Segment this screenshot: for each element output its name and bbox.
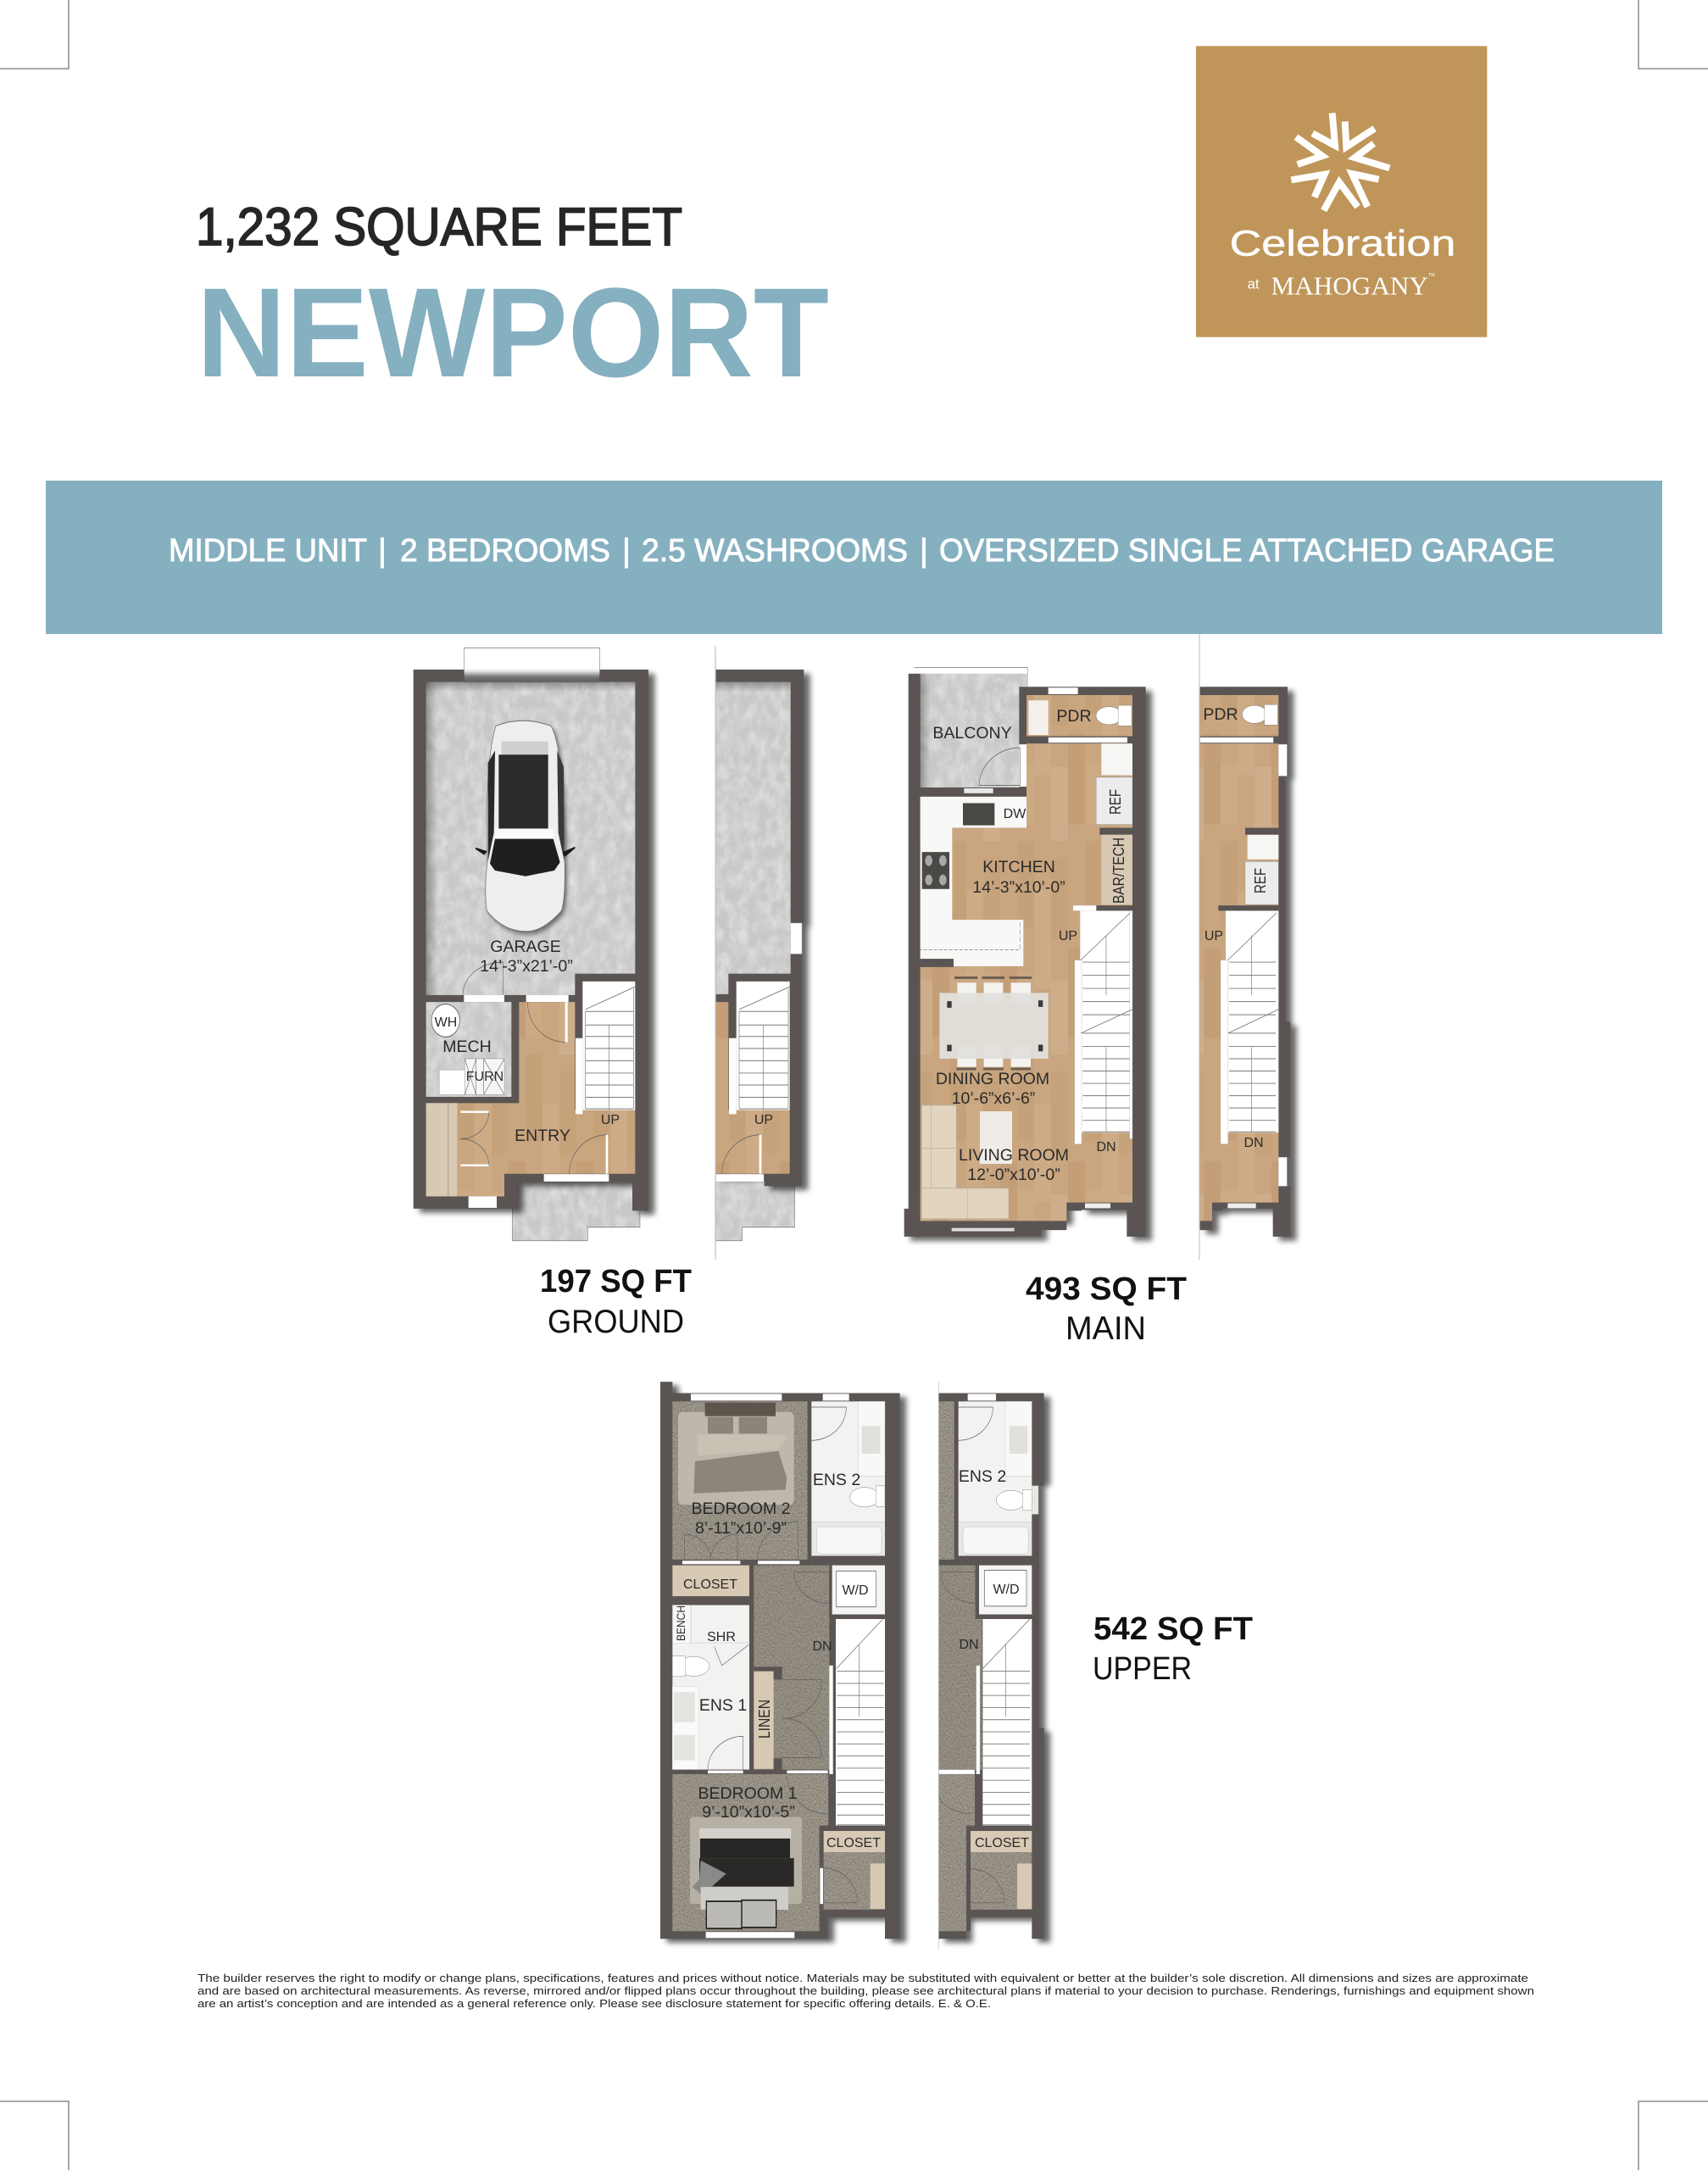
label: mech: MECH bbox=[442, 1038, 492, 1056]
title: NEWPORT: NEWPORT bbox=[197, 261, 829, 403]
bed 1 bbox=[693, 1828, 794, 1928]
divider line bbox=[1199, 634, 1200, 1260]
car bbox=[476, 721, 575, 935]
banner text: | bbox=[920, 533, 928, 569]
banner text: MIDDLE UNIT bbox=[169, 533, 367, 569]
label: down: DN bbox=[1096, 1140, 1116, 1155]
panel: ground floor plan bbox=[414, 648, 810, 1259]
label: bedroom 1 size: 9’-10”x10’-5” bbox=[702, 1803, 795, 1822]
ground plan drawing bbox=[414, 648, 654, 1241]
label: living size: 12’-0”x10’-0” bbox=[967, 1166, 1060, 1184]
banner text: 2 BEDROOMS bbox=[400, 533, 610, 569]
icon: starburst bbox=[1291, 113, 1389, 210]
label: garage size: 14’-3”x21’-0” bbox=[480, 957, 573, 976]
label: ensuite 2: ENS 2 bbox=[813, 1471, 860, 1489]
logo: Celebration at Mahogany bbox=[1196, 46, 1487, 337]
feature banner bbox=[46, 481, 1662, 634]
label: bedroom 1: BEDROOM 1 bbox=[698, 1784, 798, 1803]
logo subline: TM bbox=[1428, 273, 1435, 278]
main floor name: MAIN bbox=[1065, 1310, 1146, 1347]
logo subline: at bbox=[1248, 276, 1260, 292]
disclaimer text: and are based on architectural measurements. As reverse, mirrored and/or flipped plans occur throughout the building, please see architectural plans if material to your decision to purchase. Renderings, furnishings and equipment shown bbox=[198, 1985, 1534, 1997]
label: garage: GARAGE bbox=[490, 938, 561, 956]
main plan drawing bbox=[904, 668, 1152, 1241]
ground floor area: 197 SQ FT bbox=[540, 1264, 692, 1299]
label: up, right segment: UP bbox=[1205, 929, 1223, 943]
label: powder room, right segment: PDR bbox=[1203, 705, 1238, 724]
main plan right segment bbox=[1200, 687, 1297, 1241]
banner text: | bbox=[622, 533, 631, 569]
banner text bbox=[169, 533, 1555, 569]
label: powder room: PDR bbox=[1056, 707, 1092, 726]
label: up: UP bbox=[1059, 929, 1077, 943]
sofa bbox=[921, 1105, 1009, 1219]
ground floor name: GROUND bbox=[548, 1304, 684, 1340]
upper plan right segment bbox=[938, 1382, 1050, 1950]
upper floor area: 542 SQ FT bbox=[1093, 1611, 1253, 1647]
label: bedroom 2: BEDROOM 2 bbox=[691, 1500, 791, 1518]
ground plan right segment bbox=[715, 654, 810, 1259]
logo wordmark: Celebration bbox=[1230, 224, 1455, 264]
banner text: 2.5 WASHROOMS bbox=[642, 533, 908, 569]
divider line bbox=[715, 646, 716, 1260]
label: closet 2: CLOSET bbox=[826, 1836, 881, 1850]
panel: main floor plan bbox=[904, 634, 1297, 1260]
label: washer dryer: W/D bbox=[842, 1583, 869, 1598]
label: up: UP bbox=[601, 1113, 620, 1127]
upper plan drawing bbox=[660, 1382, 906, 1943]
label: closet: CLOSET bbox=[683, 1577, 737, 1592]
logo subline: MAHOGANY bbox=[1271, 271, 1428, 300]
label: down, right segment: DN bbox=[1243, 1136, 1264, 1150]
upper floor name: UPPER bbox=[1093, 1651, 1192, 1687]
label: bench: BENCH bbox=[674, 1605, 687, 1641]
label: furnace: FURN bbox=[466, 1070, 503, 1084]
label: entry: ENTRY bbox=[515, 1127, 570, 1145]
label: ensuite 1: ENS 1 bbox=[699, 1696, 747, 1715]
label: down: DN bbox=[812, 1639, 832, 1654]
label: bar/tech: BAR/TECH bbox=[1110, 837, 1127, 904]
bed 2 bbox=[693, 1403, 787, 1494]
label: fridge, right segment: REF bbox=[1252, 868, 1269, 893]
label: closet, right segment: CLOSET bbox=[975, 1836, 1029, 1850]
disclaimer text: The builder reserves the right to modify or change plans, specifications, features and prices without notice. Materials may be substituted with equivalent or better at the builder’s sole discretion. All dimensions and sizes are approximate bbox=[198, 1972, 1528, 1984]
label: dining room: DINING ROOM bbox=[936, 1070, 1049, 1088]
main floor area: 493 SQ FT bbox=[1026, 1271, 1187, 1307]
label: water heater: WH bbox=[435, 1015, 457, 1030]
label: dishwasher: DW bbox=[1004, 807, 1026, 821]
label: bedroom 2 size: 8’-11”x10’-9” bbox=[695, 1519, 787, 1538]
label: shower: SHR bbox=[707, 1630, 736, 1644]
label: ensuite 2, right segment: ENS 2 bbox=[959, 1467, 1006, 1486]
banner text: | bbox=[378, 533, 387, 569]
label: washer dryer, right segment: W/D bbox=[993, 1583, 1020, 1597]
label: fridge: REF bbox=[1107, 789, 1124, 815]
square footage heading: 1,232 SQUARE FEET bbox=[196, 198, 682, 257]
label: down, right segment: DN bbox=[959, 1638, 979, 1652]
label: linen: LINEN bbox=[756, 1700, 773, 1739]
disclaimer text bbox=[198, 1972, 1534, 2010]
label: kitchen: KITCHEN bbox=[982, 858, 1055, 876]
label: up, right segment: UP bbox=[754, 1113, 773, 1127]
label: dining size: 10’-6”x6’-6” bbox=[952, 1089, 1035, 1108]
disclaimer text: are an artist’s conception and are intended as a general reference only. Please see disclosure statement for specific offering details. E. & O.E. bbox=[198, 1998, 991, 2010]
label: kitchen size: 14’-3”x10’-0” bbox=[972, 878, 1065, 897]
label: balcony: BALCONY bbox=[932, 724, 1012, 743]
label: living room: LIVING ROOM bbox=[959, 1146, 1069, 1165]
dining table and chairs bbox=[939, 977, 1049, 1069]
banner text: OVERSIZED SINGLE ATTACHED GARAGE bbox=[939, 533, 1555, 569]
panel: upper floor plan bbox=[660, 1382, 1050, 1950]
